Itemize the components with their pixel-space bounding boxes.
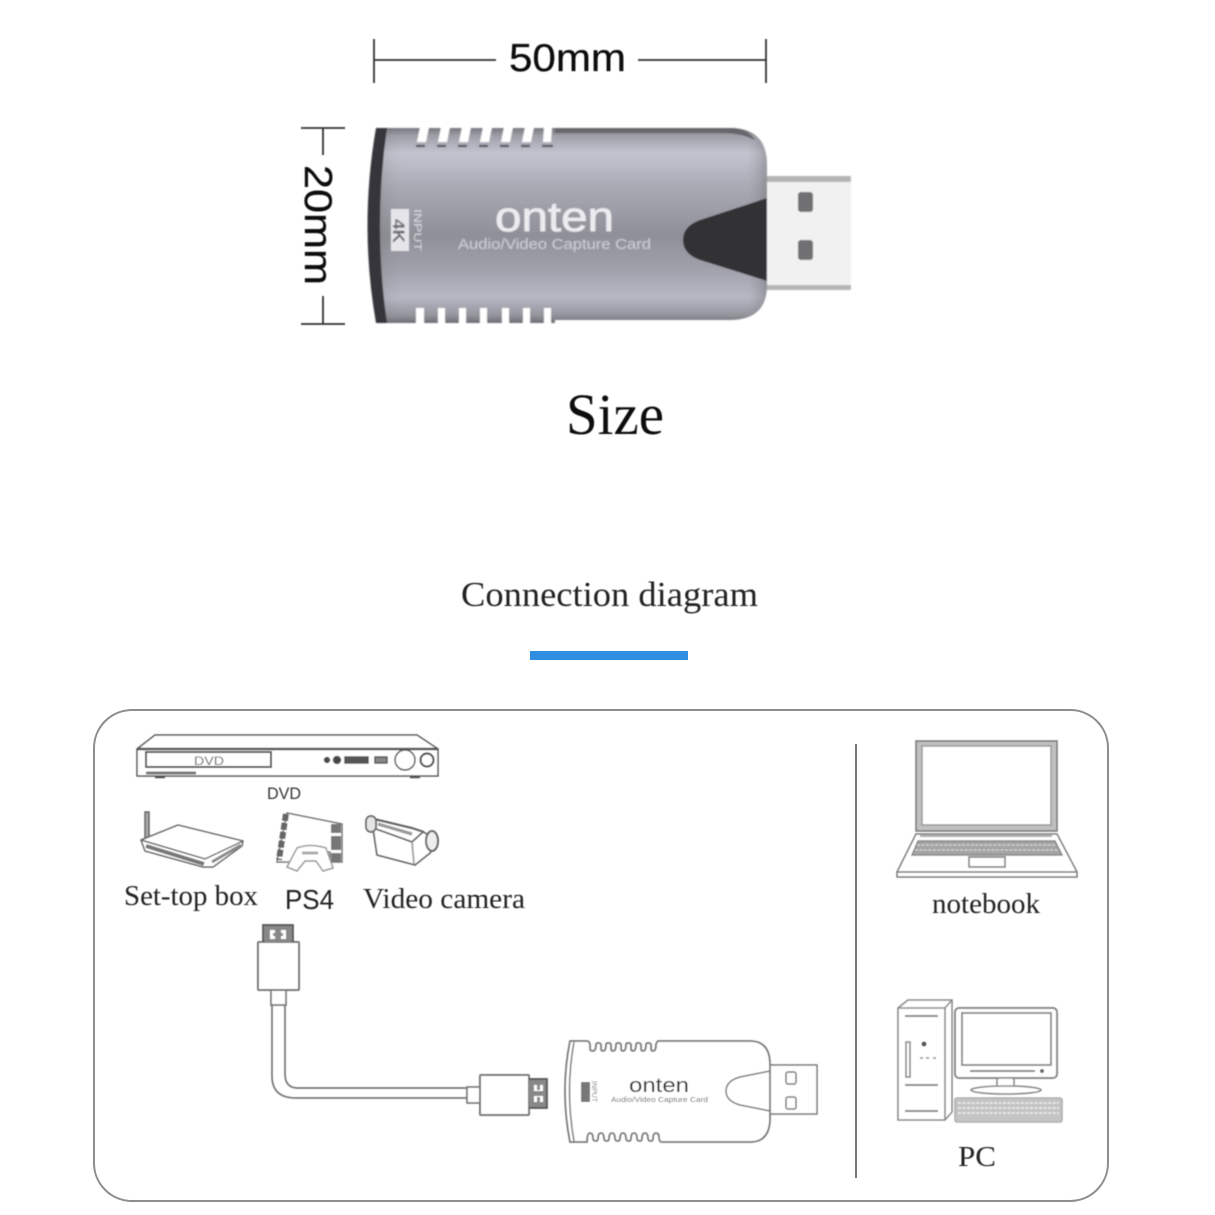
4K badge: INPUT [411, 209, 423, 251]
metal body [370, 128, 767, 323]
width dimension: 50mm: 50mm [509, 37, 626, 80]
usb plug [765, 176, 851, 290]
product photo: capture card [368, 126, 851, 324]
label: set-top box: Set-top box [124, 881, 258, 912]
icon: set-top box [141, 812, 243, 867]
icon: desktop PC [898, 1000, 1062, 1122]
icon: HDMI cable [258, 925, 547, 1115]
icon: notebook [897, 741, 1077, 877]
icon: capture card outline [565, 1041, 817, 1142]
icon: capture card outline: onten [629, 1075, 689, 1097]
icon: DVD player [137, 735, 438, 777]
heading: Connection diagram: Connection diagram [461, 575, 758, 614]
blue accent bar [530, 651, 688, 660]
height dimension: 20mm: 20mm [296, 165, 339, 285]
icon: capture card outline: INPUT [590, 1081, 597, 1103]
label: PC: PC [958, 1142, 996, 1173]
icon: video camera [366, 816, 438, 865]
black wedge [683, 198, 767, 281]
brand: onten [495, 193, 614, 240]
label: PS4: PS4 [285, 884, 334, 915]
dark end cap [368, 128, 387, 323]
width dimension: 50mm [374, 37, 766, 83]
panel: connection diagram [94, 710, 1108, 1201]
icon: DVD player: DVD [194, 754, 224, 768]
label: video camera: Video camera [363, 883, 525, 915]
label: DVD: DVD [267, 784, 301, 803]
height dimension: 20mm [296, 128, 345, 324]
heading: Size: Size [566, 382, 664, 447]
label: notebook: notebook [932, 889, 1040, 920]
4K badge [389, 209, 423, 251]
icon: game console [277, 813, 342, 871]
icon: capture card outline: Audio/Video Capture Card [611, 1095, 708, 1104]
bottom vents [416, 308, 551, 324]
4K badge: 4K [389, 219, 408, 244]
product caption: Audio/Video Capture Card [458, 236, 651, 253]
dark top edge [555, 128, 755, 140]
